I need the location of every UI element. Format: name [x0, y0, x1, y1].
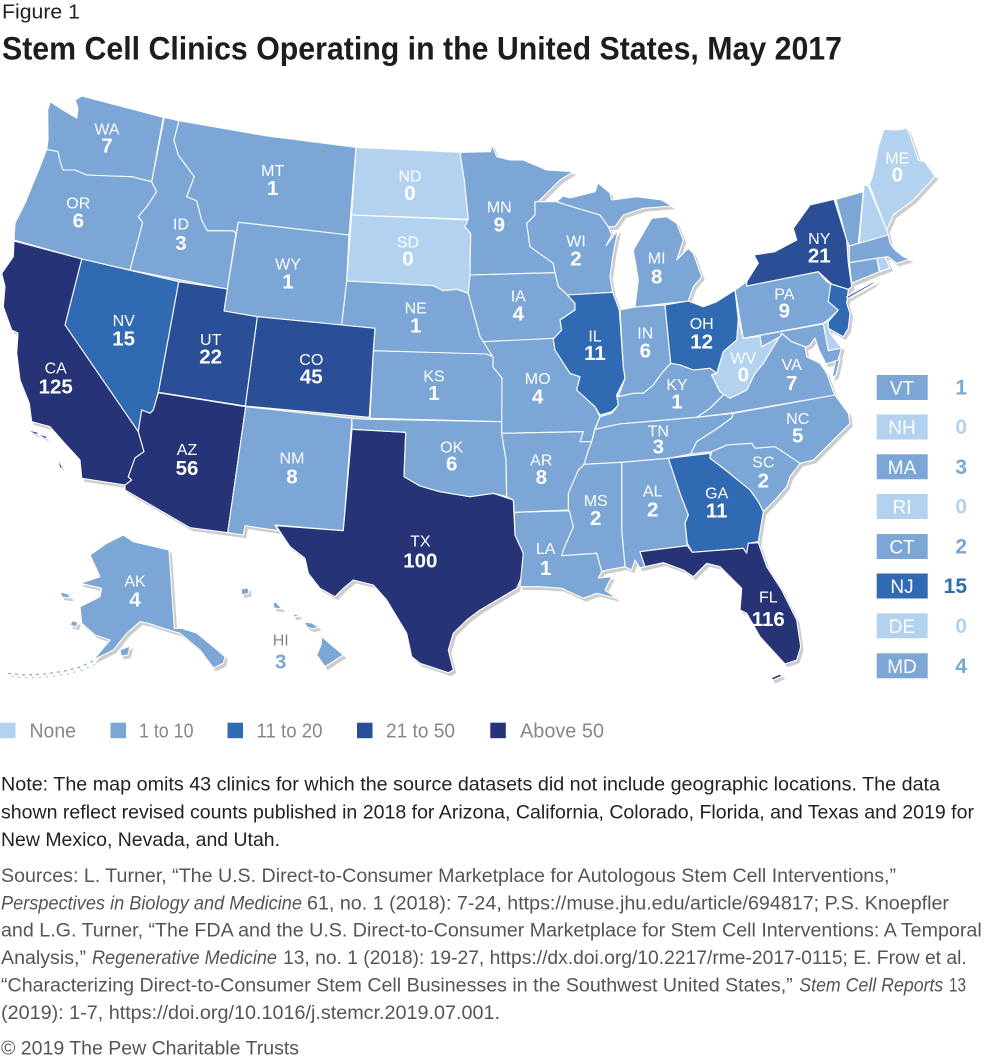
state: IL: [553, 292, 625, 415]
state: WA: [47, 96, 163, 182]
map: states: [2, 96, 935, 680]
count: UT: 22: [199, 345, 222, 368]
state: OR: [14, 149, 157, 270]
state: AK Aleutians: [5, 661, 93, 675]
legend: None: [0, 719, 76, 742]
CA Channel islands: [30, 431, 62, 468]
label: NY: NY: [808, 231, 831, 248]
map shadow: [4, 99, 938, 683]
label: MT: MT: [261, 163, 284, 180]
count: GA: 11: [706, 500, 728, 523]
label: IN: IN: [637, 325, 653, 342]
state: NH: [859, 185, 888, 244]
state: PA: [735, 272, 838, 338]
state: MI upper: [557, 183, 672, 227]
state: NV: [65, 259, 179, 432]
key: VT: 1: [955, 376, 967, 400]
legend: Above 50: Above 50: [520, 719, 604, 742]
label: GA: GA: [705, 485, 729, 502]
state labels: [39, 121, 909, 673]
count: MO: 4: [532, 385, 544, 408]
label: OH: OH: [690, 316, 714, 333]
count: NV: 15: [112, 328, 135, 351]
state: MN: [460, 144, 573, 275]
state: IN: [618, 305, 671, 397]
label: MO: MO: [525, 371, 551, 388]
state: NC: [691, 395, 850, 463]
label: KY: KY: [666, 377, 688, 394]
sources: (2019): 1-7, https://doi.org/10.1016/j.stemcr.2019.07.001.: [1, 1003, 500, 1024]
sources: [1, 866, 982, 1024]
state: OH: [665, 290, 738, 373]
count: TN: 3: [653, 435, 664, 458]
count: AZ: 56: [176, 457, 198, 480]
state: AR: [502, 432, 592, 512]
state: ND: [352, 147, 468, 219]
label: FL: FL: [759, 590, 778, 607]
small-state key: [877, 375, 967, 678]
key: CT: CT: [889, 538, 915, 558]
key: NH: 0: [955, 416, 967, 439]
state: VA: [697, 333, 840, 417]
count: AR: 8: [536, 466, 547, 489]
label: ID: ID: [173, 216, 189, 233]
count: IN: 6: [640, 340, 651, 363]
label: TX: TX: [410, 534, 431, 551]
state: TX: [276, 429, 523, 673]
count: NE: 1: [410, 315, 421, 338]
state: KS: [370, 351, 502, 422]
key: RI: [877, 494, 967, 519]
label: AZ: AZ: [177, 442, 197, 459]
label: SC: SC: [752, 454, 774, 471]
state: VT: [836, 192, 863, 246]
count: OR: 6: [73, 209, 84, 232]
key: NH: NH: [888, 418, 916, 439]
sources: Regenerative Medicine: [92, 948, 277, 969]
label: HI: HI: [273, 633, 289, 650]
label: PA: PA: [774, 286, 795, 303]
key: MA: MA: [888, 458, 917, 479]
key: CT: 2: [955, 536, 967, 558]
key: MA: [877, 454, 967, 479]
label: AR: AR: [530, 453, 552, 470]
count: TX: 100: [403, 549, 437, 572]
label: CO: CO: [299, 352, 323, 369]
label: WA: WA: [94, 121, 120, 138]
count: KS: 1: [428, 382, 440, 405]
key: NJ: NJ: [890, 577, 914, 598]
sources: “Characterizing Direct-to-Consumer Stem Cell Businesses in the Southwest United States,”: [1, 976, 793, 997]
label: WY: WY: [275, 256, 301, 273]
state: FL: [640, 543, 801, 680]
state: RI: [877, 257, 890, 272]
count: LA: 1: [540, 557, 551, 580]
state: CO: [245, 317, 375, 417]
count: KY: 1: [671, 390, 683, 413]
count: VA: 7: [786, 372, 797, 395]
sources: Sources: L. Turner, “The U.S. Direct-to-Consumer Marketplace for Autologous Stem Cell Interventions,”: [1, 866, 896, 887]
count: SC: 2: [758, 469, 769, 492]
state: CA: [2, 241, 144, 485]
label: LA: LA: [536, 541, 556, 558]
key: DE: DE: [889, 617, 915, 638]
legend: 11 to 20: 11 to 20: [256, 719, 322, 742]
key: RI: 0: [955, 496, 967, 518]
label: IA: IA: [511, 289, 526, 306]
count: HI: 3: [275, 650, 286, 673]
count: MN: 9: [494, 214, 505, 237]
colour legend: [0, 719, 604, 742]
label: SD: SD: [397, 235, 419, 252]
key: MD: MD: [887, 657, 917, 678]
count: IL: 11: [584, 342, 606, 365]
title: Stem Cell Clinics Operating in the United States, May 2017: [2, 30, 842, 66]
count: ND: 0: [404, 182, 416, 205]
state: ID: [130, 117, 236, 289]
state: GA: [668, 453, 763, 553]
key: MD: [877, 653, 967, 678]
key: VT: [877, 375, 967, 400]
count: AK: 4: [129, 589, 141, 612]
label: MN: MN: [487, 200, 512, 217]
legend: 1 to 10: [110, 719, 194, 742]
count: CO: 45: [300, 365, 323, 388]
state: MO: [483, 338, 600, 442]
label: AL: AL: [643, 484, 663, 501]
count: WV: 0: [738, 364, 749, 387]
sources: 13: [949, 976, 966, 997]
label: CA: CA: [45, 360, 67, 377]
label: OK: OK: [440, 440, 464, 457]
note: New Mexico, Nevada, and Utah.: [1, 829, 280, 851]
label: ME: ME: [885, 150, 909, 167]
label: NC: NC: [786, 411, 809, 428]
state: NJ: [828, 284, 850, 337]
key: CT: [877, 534, 967, 559]
legend: 21 to 50: [357, 719, 455, 742]
count: NM: 8: [286, 465, 298, 488]
count: MS: 2: [590, 507, 601, 530]
state: KY: [595, 363, 725, 429]
state: ME: [869, 128, 935, 230]
label: VA: VA: [782, 357, 802, 374]
count: NC: 5: [792, 424, 803, 447]
count: PA: 9: [779, 300, 790, 323]
state: CT: [849, 258, 879, 283]
label: IL: IL: [588, 329, 602, 346]
state: HI: [241, 588, 343, 667]
label: KS: KS: [423, 369, 445, 386]
state: IA: [468, 273, 575, 342]
count: ME: 0: [892, 164, 903, 187]
note: shown reflect revised counts published in 2018 for Arizona, California, Colorado, Florida, and Texas and 2019 for: [1, 801, 974, 823]
state: NY: [747, 199, 877, 298]
label: MI: MI: [648, 250, 666, 267]
state: TN: [584, 413, 733, 464]
sources: Perspectives in Biology and Medicine: [1, 893, 302, 914]
label: NE: NE: [405, 300, 427, 317]
state: MD: [743, 324, 842, 364]
key: DE: [877, 613, 967, 638]
label: ND: ND: [398, 169, 422, 186]
state: WV: [712, 320, 782, 398]
label: WI: WI: [566, 234, 586, 251]
sources: Analysis,”: [1, 948, 86, 969]
label: WV: WV: [730, 350, 757, 367]
state: AL: [622, 458, 688, 570]
label: NM: NM: [280, 450, 304, 467]
key: RI: RI: [892, 498, 912, 518]
count: MT: 1: [267, 177, 278, 200]
label: MS: MS: [584, 493, 608, 510]
count: IA: 4: [513, 303, 525, 326]
legend: 1 to 10: 1 to 10: [139, 719, 194, 742]
key: NH: [877, 414, 967, 440]
legend: 21 to 50: 21 to 50: [386, 719, 455, 742]
state: SC: [710, 443, 800, 512]
count: WI: 2: [570, 248, 582, 271]
state: MI lower: [633, 217, 702, 307]
count: FL: 116: [752, 608, 785, 631]
state: OK: [352, 418, 507, 497]
note: [1, 774, 974, 851]
label: AK: AK: [124, 574, 146, 591]
state: MA: [849, 235, 910, 263]
count: AL: 2: [647, 499, 658, 522]
legend: None: None: [30, 719, 76, 742]
note: Note: The map omits 43 clinics for which the source datasets did not include geographic locations. The data: [1, 774, 940, 796]
state: AZ: [125, 393, 246, 533]
state: WI: [527, 202, 618, 295]
sources: 61, no. 1 (2018): 7-24, https://muse.jhu.edu/article/694817; P.S. Knoepfler: [307, 893, 950, 914]
state: DE: [823, 322, 842, 351]
figure number: Figure 1: [2, 0, 80, 24]
state: UT: [158, 282, 257, 406]
key: NJ: [877, 574, 967, 598]
count: WY: 1: [282, 270, 294, 293]
state: NM: [228, 407, 352, 535]
state: AK: [60, 535, 225, 668]
state: WY: [224, 222, 349, 325]
sources: 13, no. 1 (2018): 19-27, https://dx.doi.org/10.2217/rme-2017-0115; E. Frow et al.: [283, 948, 967, 969]
label: OR: OR: [66, 196, 90, 213]
count: ID: 3: [175, 232, 187, 255]
count: MI: 8: [651, 265, 662, 288]
count: SD: 0: [402, 248, 414, 271]
legend: 11 to 20: [228, 719, 322, 742]
count: CA: 125: [39, 375, 73, 398]
state: LA: [514, 511, 617, 598]
key: VT: VT: [890, 378, 915, 400]
state: SD: [347, 215, 471, 293]
count: OH: 12: [690, 330, 713, 353]
count: NY: 21: [808, 244, 831, 267]
state: NE: [342, 281, 493, 356]
key: MA: 3: [955, 456, 967, 479]
key: MD: 4: [955, 655, 967, 678]
sources: and L.G. Turner, “The FDA and the U.S. Direct-to-Consumer Marketplace for Stem Cell Interventions: A Temporal: [1, 921, 982, 942]
label: UT: UT: [200, 332, 222, 349]
state: MT: [174, 121, 356, 235]
key: NJ: 15: [944, 575, 967, 598]
label: NV: NV: [113, 313, 135, 330]
count: OK: 6: [446, 453, 457, 476]
sources: Stem Cell Reports: [799, 976, 944, 997]
label: TN: TN: [648, 424, 669, 441]
key: DE: 0: [955, 615, 967, 638]
count: WA: 7: [101, 135, 113, 158]
state: MS: [562, 462, 625, 572]
